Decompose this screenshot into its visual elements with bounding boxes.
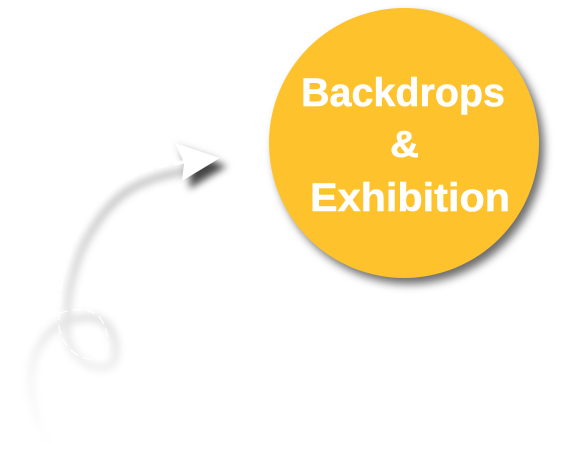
arrow shaft dashes, middle [60, 184, 118, 297]
badge shadow [274, 14, 544, 284]
line 3: Exhibition [310, 176, 510, 220]
arrowhead shadow [182, 151, 227, 189]
line 1: Backdrops [301, 71, 505, 115]
arrowhead [175, 143, 220, 181]
arrowhead halo [175, 143, 220, 181]
ampersand: & [390, 124, 419, 165]
arrow shaft dashes, loop [59, 297, 108, 359]
yellow circle [269, 8, 539, 278]
curved arrow [31, 143, 227, 446]
badge [269, 8, 544, 284]
arrow shaft shadow [31, 170, 192, 446]
arrow shaft dashes, upper [118, 162, 184, 184]
badge title [301, 71, 510, 220]
